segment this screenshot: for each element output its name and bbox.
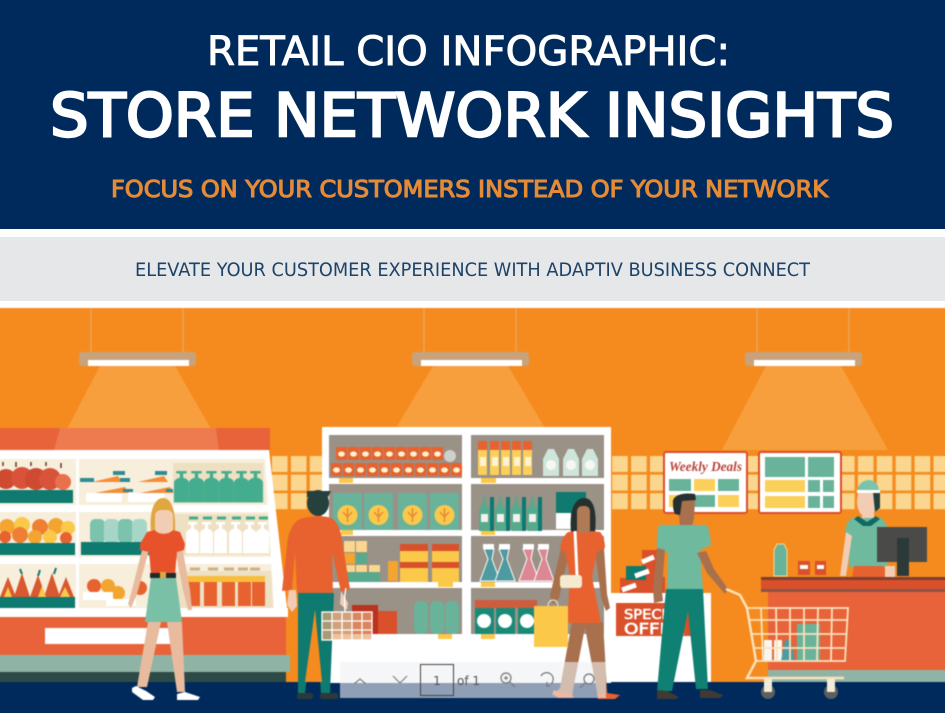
oranges xyxy=(0,517,75,544)
spray bottles xyxy=(480,544,554,581)
jars on counter xyxy=(798,561,826,575)
shopping cart xyxy=(726,589,848,699)
cashier xyxy=(840,480,927,577)
icon: page up xyxy=(354,679,366,684)
counter front xyxy=(0,608,288,617)
page number box: 1 xyxy=(433,674,441,688)
checkout counter xyxy=(761,544,945,682)
icon: rotate xyxy=(541,673,553,686)
grey banner xyxy=(0,237,945,301)
tins xyxy=(331,447,462,476)
woman in green skirt xyxy=(128,498,200,700)
shopping basket xyxy=(322,588,372,640)
arms xyxy=(550,548,610,611)
banner text: ELEVATE YOUR CUSTOMER EXPERIENCE WITH ADAPTIV BUSINESS CONNECT xyxy=(135,260,811,281)
produce cooler xyxy=(0,428,290,682)
store scene xyxy=(0,308,945,713)
icon: search xyxy=(580,674,594,688)
green bottles xyxy=(174,471,263,502)
legs xyxy=(137,622,185,692)
orange subtitle: FOCUS ON YOUR CUSTOMERS INSTEAD OF YOUR NETWORK xyxy=(111,177,829,203)
icon: zoom in xyxy=(501,673,515,687)
page count: of 1 xyxy=(457,674,480,688)
store back wall xyxy=(0,308,945,683)
carrots xyxy=(80,471,174,502)
menu board xyxy=(759,452,841,513)
apples xyxy=(0,462,71,490)
page number box xyxy=(420,664,454,696)
title line one: RETAIL CIO INFOGRAPHIC: xyxy=(207,29,730,75)
lamp centre xyxy=(396,308,545,428)
lamp right xyxy=(722,308,888,450)
cleaning boxes xyxy=(475,600,537,634)
bottle on counter xyxy=(774,544,787,576)
arms xyxy=(128,546,192,610)
greens xyxy=(90,519,147,543)
title line two: STORE NETWORK INSIGHTS xyxy=(50,81,894,151)
yellow shelf tags xyxy=(339,478,496,639)
special offer display: SPECIAL xyxy=(624,608,685,623)
yellow cans xyxy=(478,441,532,475)
detergent bottles xyxy=(543,449,598,476)
weekly deals sign: Weekly Deals xyxy=(669,460,743,475)
icon: page down xyxy=(393,676,407,683)
woman in red dress with shopping bag xyxy=(534,498,620,699)
man in red shirt with basket xyxy=(282,490,372,699)
green jugs xyxy=(414,601,459,634)
cereal boxes xyxy=(333,493,459,530)
juice bottles xyxy=(187,569,265,606)
header band xyxy=(0,0,945,229)
milk bottles xyxy=(186,522,269,553)
pears and peppers xyxy=(0,568,74,597)
teal bottles xyxy=(479,497,542,531)
legs xyxy=(554,622,608,698)
special offer display xyxy=(611,550,711,682)
tray of fruit xyxy=(83,579,147,606)
wall tiles xyxy=(272,456,945,511)
weekly deals sign xyxy=(664,452,747,513)
man in green shirt xyxy=(653,493,728,699)
small boxes stack xyxy=(344,541,398,582)
shopping bag xyxy=(534,600,568,647)
pdf viewer toolbar xyxy=(340,662,606,698)
red packs xyxy=(352,605,397,634)
grocery shelving xyxy=(322,427,611,683)
lamp left xyxy=(56,308,223,450)
register monitor xyxy=(877,527,927,576)
special offer display: OFFER xyxy=(624,620,684,638)
floor xyxy=(0,682,945,713)
large yellow cartons xyxy=(400,544,459,582)
